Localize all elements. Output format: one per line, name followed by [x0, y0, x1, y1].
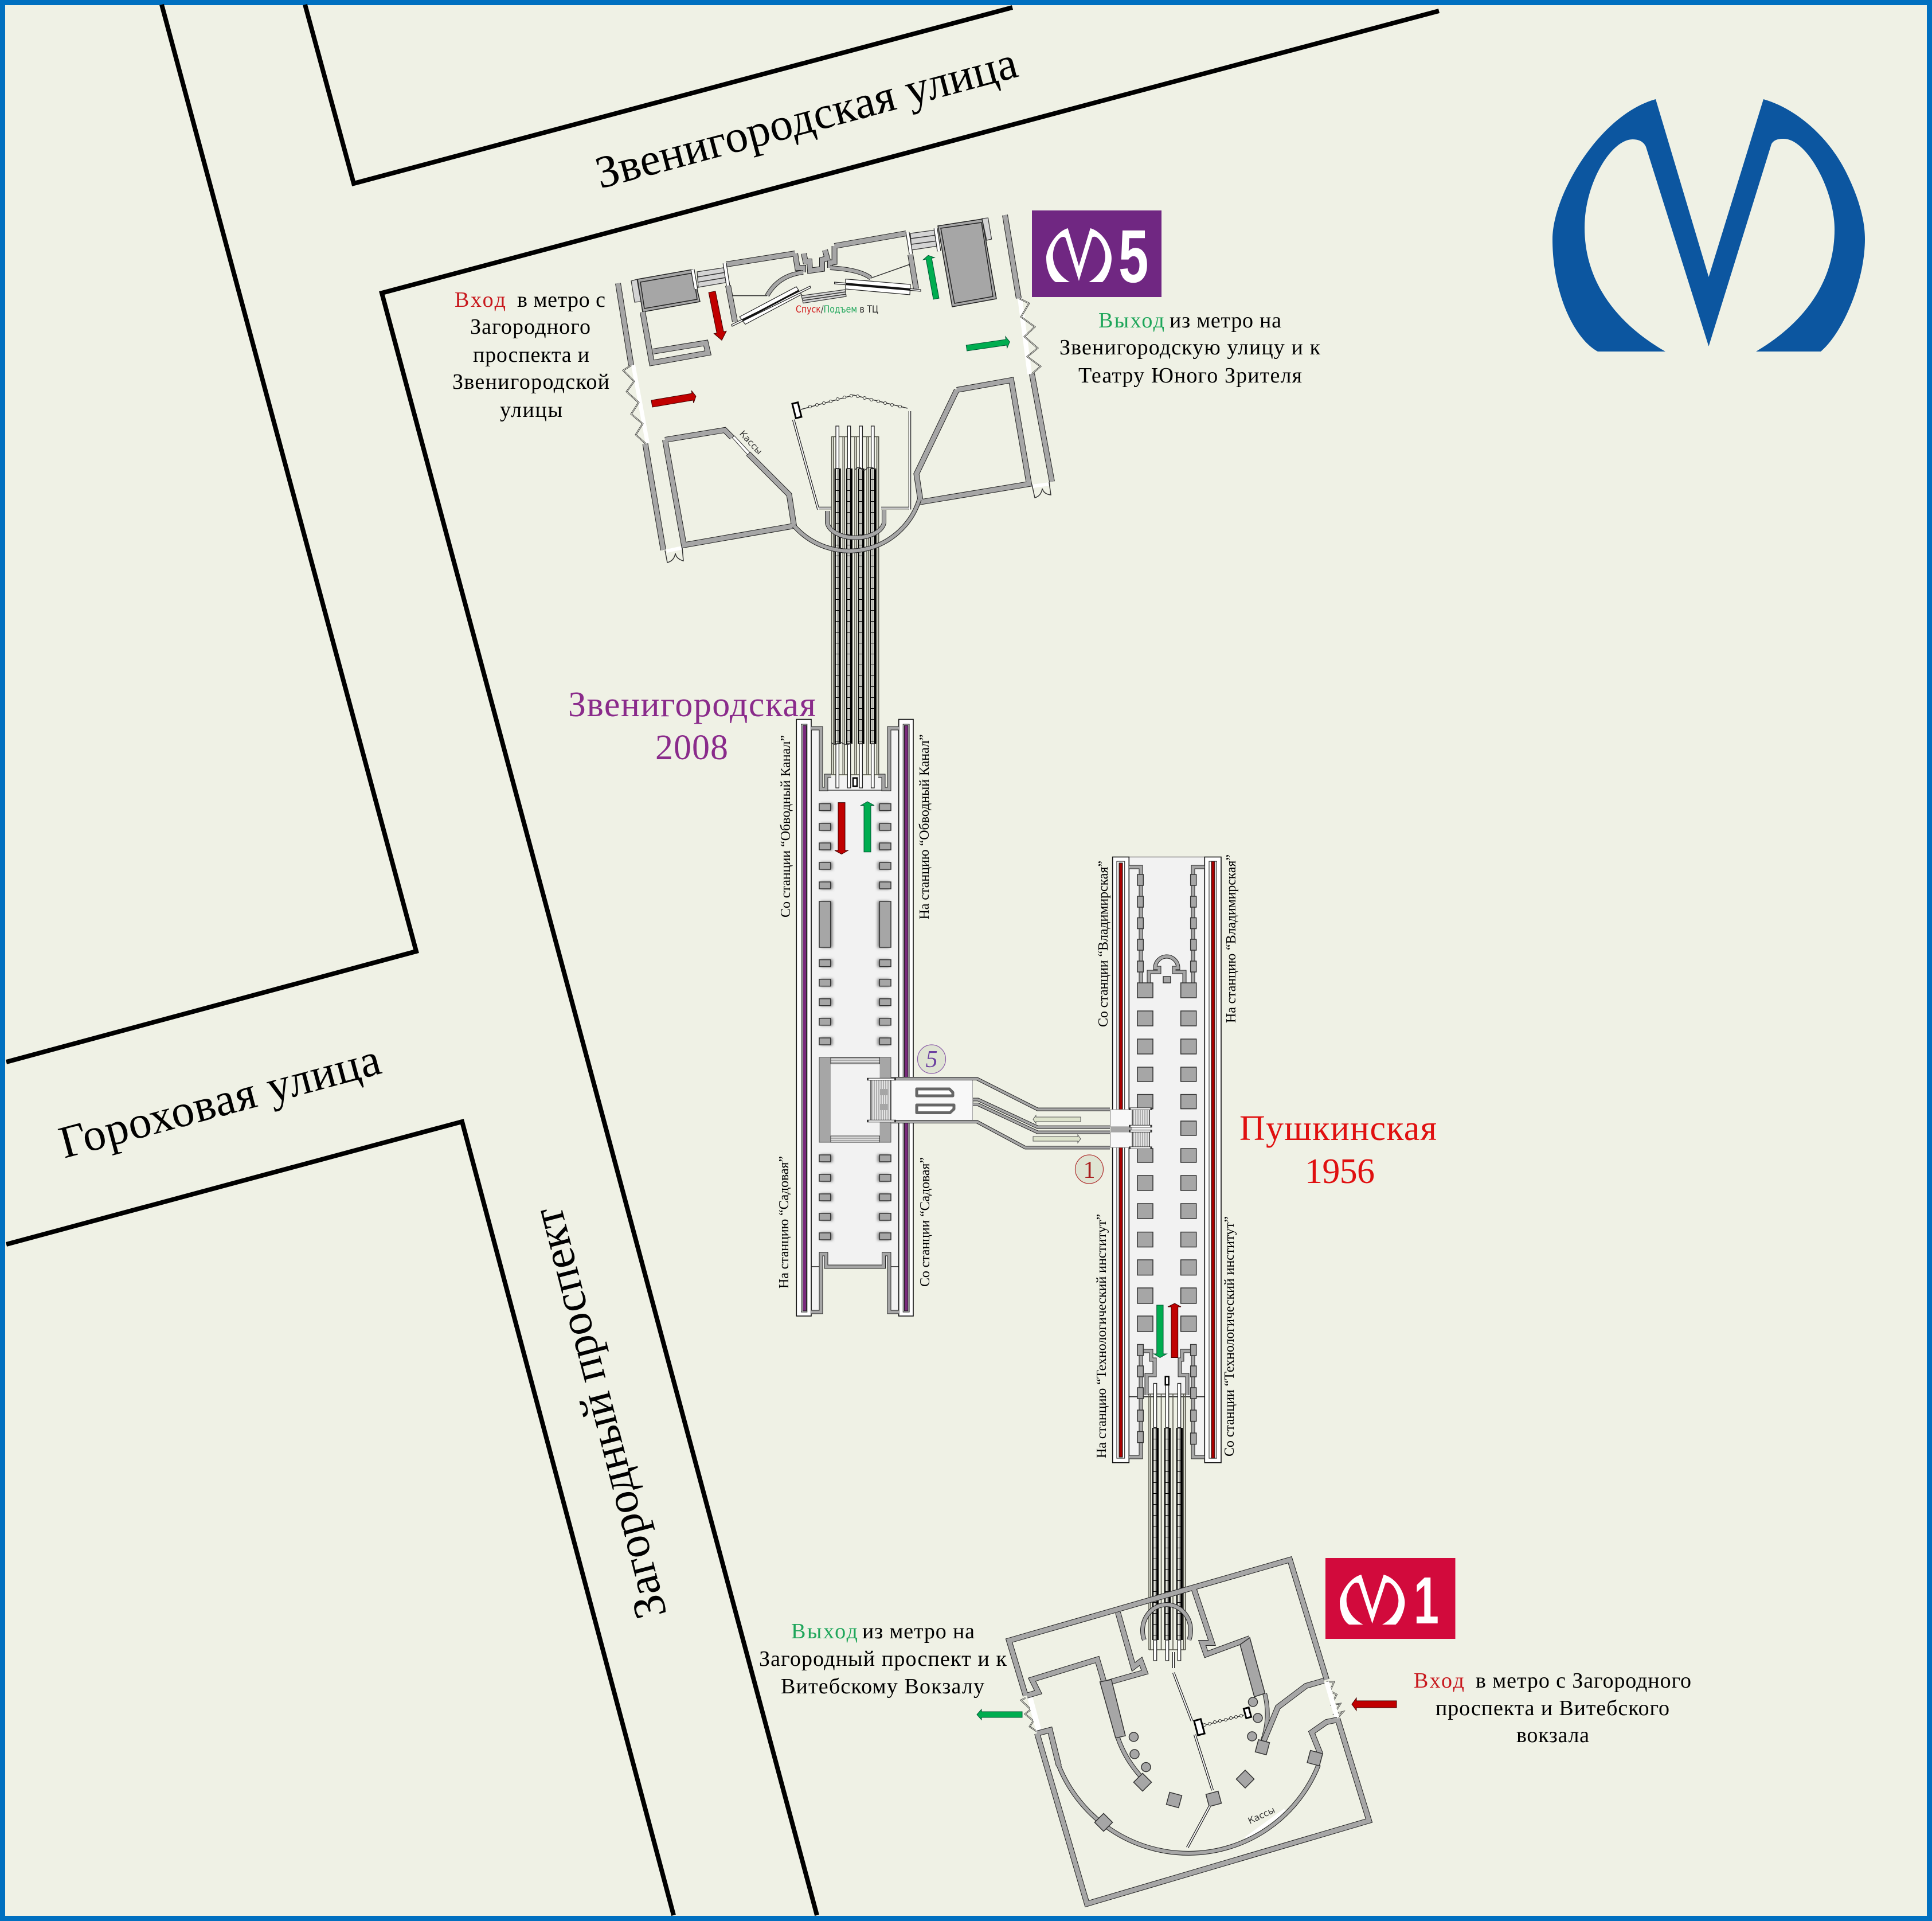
platform hall [811, 727, 899, 1313]
arrow: passage left [1033, 1115, 1081, 1123]
callout: entrance line 5: проспекта и [473, 343, 589, 367]
callout: entrance line 1: в метро с Загородного [1476, 1669, 1691, 1693]
station title: Pushkinskaya: Пушкинская [1239, 1109, 1437, 1148]
badge: line 5: 5 [1118, 215, 1148, 299]
callout: exit line 5: из метро на [1170, 309, 1281, 333]
label: ticket office: Кассы [1246, 1805, 1277, 1826]
badge: line 1 [1325, 1558, 1455, 1639]
vestibule: Pushkinskaya (line 1) [1009, 1560, 1369, 1904]
passage walls [891, 1079, 1110, 1147]
openings [1027, 1681, 1339, 1840]
transfer passage [867, 1078, 1152, 1148]
ticket window [732, 436, 750, 455]
walls [1059, 1604, 1319, 1853]
station: Zvenigorodskaya [796, 719, 913, 1316]
street label: Zvenigorodskaya: Звенигородская улица [590, 37, 1023, 198]
station title: Zvenigorodskaya: Звенигородская [568, 685, 816, 724]
right column row [879, 804, 891, 1240]
wall pilasters [1137, 874, 1196, 1444]
side rooms [638, 219, 996, 312]
direction labels: На станцию “Технологический институт” [1094, 1214, 1109, 1458]
escalator tunnel: Pushkinskaya [1149, 1377, 1186, 1661]
station title: Zvenigorodskaya [568, 685, 816, 767]
icon: large St Petersburg metro logo [1552, 99, 1865, 352]
direction labels: На станцию “Обводный Канал” [917, 734, 932, 920]
station title: Pushkinskaya [1239, 1109, 1437, 1191]
label: ticket office: Кассы [737, 428, 764, 456]
callout: entrance line 5: Вход [455, 288, 506, 312]
callout: exit line 1: из метро на [862, 1619, 975, 1643]
arrow: entrance right [651, 390, 697, 410]
callout: entrance line 5: улицы [500, 398, 562, 422]
vestibule: Zvenigorodskaya (line 5) [618, 215, 1343, 1732]
callout: exit line 5: Звенигородскую улицу и к [1059, 335, 1321, 360]
callout: entrance line 5: в метро с [517, 288, 605, 312]
arrow: entrance left line 1 [1352, 1698, 1397, 1711]
station title: Zvenigorodskaya: 2008 [655, 728, 728, 767]
arrow: entrance down [706, 291, 728, 341]
walls [811, 728, 899, 1312]
thick wall blocks [1100, 1638, 1265, 1738]
arrow: passage right [1033, 1135, 1081, 1143]
arrow: exit up [922, 254, 942, 300]
central stair block [819, 1057, 891, 1142]
marker: line 5: 5 [925, 1047, 938, 1073]
callout: entrance line 1: вокзала [1516, 1723, 1589, 1747]
station title: Pushkinskaya: 1956 [1305, 1152, 1375, 1191]
callout: exit line 5: Выход [1098, 309, 1164, 333]
round columns [1129, 1697, 1262, 1772]
turnstile doors [1194, 1719, 1204, 1735]
callout: exit line 5: Театру Юного Зрителя [1078, 364, 1302, 388]
direction labels: Со станции “Обводный Канал” [779, 735, 793, 917]
badge: line 5 [1032, 210, 1161, 299]
callout: entrance line 5: Звенигородской [452, 370, 609, 394]
escalator tunnel: Zvenigorodskaya [831, 426, 879, 788]
walls [1129, 867, 1204, 1457]
direction labels [777, 734, 1239, 1458]
stairs to Pushkinskaya [1129, 1109, 1152, 1148]
track box left [1113, 857, 1129, 1463]
white wall pillars [693, 228, 939, 289]
arrow: red down [835, 803, 848, 854]
turnstiles [808, 395, 901, 408]
left big columns [1137, 983, 1153, 1332]
turnstiles [1203, 1715, 1243, 1726]
label: mall stairs: Спуск/Подъем в ТЦ [796, 304, 878, 315]
callout: entrance line 1: Вход [1414, 1669, 1464, 1693]
arrow: green up [861, 802, 874, 852]
entrance and exit openings [631, 298, 1050, 553]
direction labels: Со станции “Садовая” [918, 1157, 933, 1287]
direction labels: На станцию “Садовая” [777, 1156, 792, 1289]
badge: line 1: 1 [1414, 1564, 1439, 1638]
direction labels: Со станции “Владимирская” [1096, 861, 1111, 1027]
track box right [899, 719, 913, 1316]
callout: entrance line 5 [452, 288, 609, 422]
track box right [1204, 857, 1221, 1463]
marker: line 1: 1 [1084, 1157, 1095, 1184]
callout: exit line 1: Витебскому Вокзалу [781, 1674, 984, 1699]
marker: line 1 [1075, 1155, 1103, 1184]
street label: Zagorodny: Загородный проспект [522, 1202, 676, 1625]
street label: Gorokhovaya: Гороховая улица [54, 1034, 386, 1168]
city street outlines [6, 5, 1439, 1915]
turnstile door [792, 403, 801, 418]
stair strips [631, 218, 992, 303]
arrow: exit right [966, 336, 1011, 354]
right big columns [1181, 983, 1196, 1332]
direction labels: Со станции “Технологический институт” [1222, 1216, 1237, 1457]
marker: line 5 [917, 1045, 946, 1073]
arrow: exit left line 1 [977, 1709, 1022, 1720]
escalators to mall [732, 279, 921, 326]
passage rooms [891, 1078, 973, 1122]
callout: entrance line 1: проспекта и Витебского [1436, 1696, 1669, 1720]
callout: exit line 1: Загородный проспект и к [759, 1647, 1007, 1671]
thin partitions [732, 264, 910, 409]
track box left [796, 719, 811, 1316]
doors [623, 298, 1343, 1732]
stairs to Zvenigorodskaya [867, 1079, 896, 1121]
walls [618, 215, 1052, 550]
arrow: green down [1154, 1305, 1167, 1358]
left column row [819, 804, 831, 1240]
arrow: red up [1168, 1303, 1181, 1358]
callout: entrance line 1 [1414, 1669, 1691, 1747]
callout: exit line 1 [759, 1619, 1007, 1699]
direction labels: На станцию “Владимирская” [1224, 854, 1239, 1023]
station: Pushkinskaya [1113, 857, 1221, 1463]
callout: entrance line 5: Загородного [470, 315, 590, 339]
platform hall [1129, 857, 1205, 1457]
callout: exit line 1: Выход [791, 1619, 858, 1643]
callout: exit line 5 [1059, 309, 1321, 388]
rooms inside passage [917, 1089, 954, 1112]
square columns [1094, 1740, 1323, 1832]
thin partitions [1174, 1652, 1213, 1848]
